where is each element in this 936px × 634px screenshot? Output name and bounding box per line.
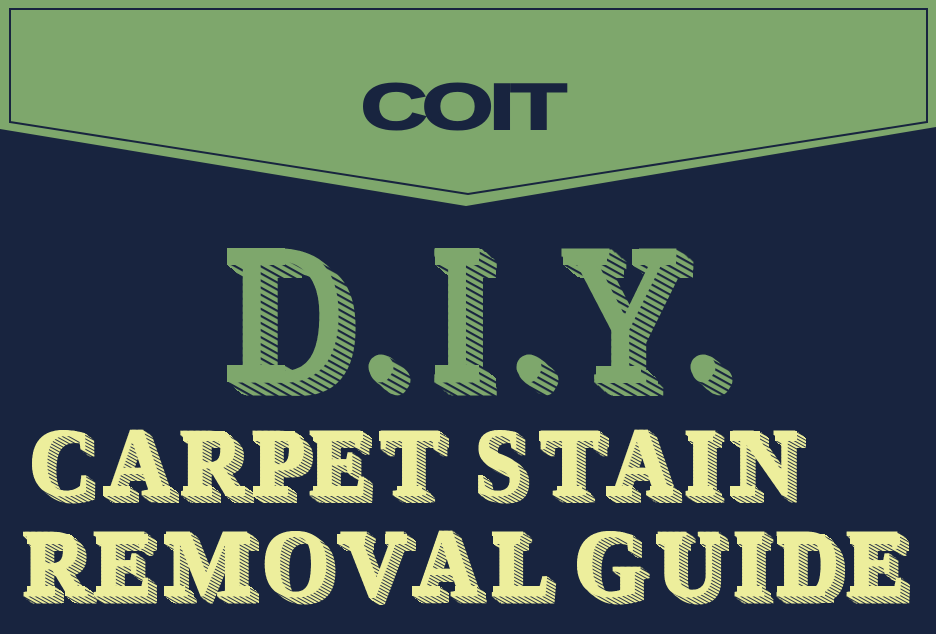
title: Carpet Stain Removal Guide: REMOVAL GUIDE [22, 511, 905, 618]
title: D.I.Y.: D.I.Y. [226, 200, 723, 425]
title: D.I.Y.: D.I.Y. [226, 200, 723, 425]
title: Carpet Stain Removal Guide: CARPET STAIN [28, 410, 796, 517]
title: Carpet Stain Removal Guide: CARPET STAIN [28, 410, 796, 517]
COIT logo: COIT [361, 70, 567, 143]
green pennant banner [0, 0, 936, 206]
title: Carpet Stain Removal Guide [0, 410, 936, 634]
title: Carpet Stain Removal Guide: REMOVAL GUIDE [22, 511, 905, 618]
